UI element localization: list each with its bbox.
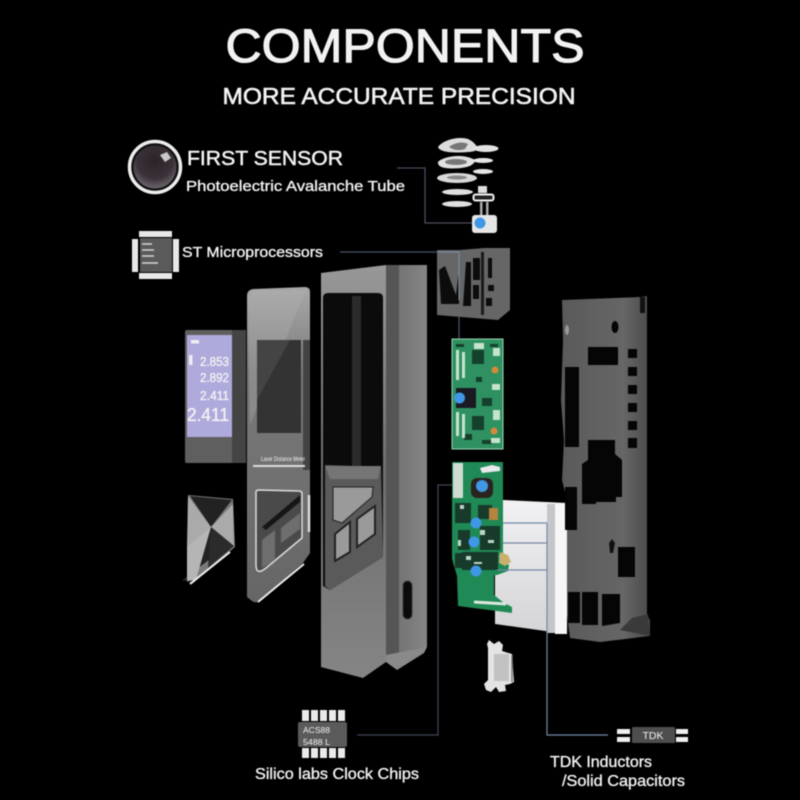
callout lines: inductors and capacitors	[497, 523, 608, 735]
label: TDK inductors and solid capacitors: TDK Inductors	[550, 754, 652, 771]
callout line: microprocessors	[340, 252, 459, 340]
icon: camera lens sensor	[130, 142, 180, 192]
title: COMPONENTS	[226, 19, 584, 72]
circuit board lower	[452, 462, 512, 613]
icon: TDK inductor: TDK	[642, 730, 664, 742]
label: first sensor: FIRST SENSOR	[187, 147, 343, 170]
rear frame	[561, 296, 650, 642]
callout line: sensor	[397, 168, 472, 223]
lens stack exploded	[437, 138, 498, 233]
label: clock chips: Silico labs Clock Chips	[255, 766, 419, 783]
display module: 2.892	[200, 370, 229, 385]
icon: ST microprocessor chip	[132, 231, 179, 279]
display module: 2.411	[187, 405, 229, 425]
label: ST microprocessors: ST Microprocessors	[182, 245, 323, 261]
icon: TDK inductor	[617, 727, 688, 743]
front cover plate: Laser Distance Meter	[261, 457, 305, 463]
label: TDK inductors and solid capacitors: /Solid Capacitors	[562, 773, 685, 790]
icon: clock chip: ACS88	[303, 726, 331, 735]
main housing	[321, 265, 427, 678]
metal button plate	[182, 495, 235, 584]
circuit board upper	[452, 339, 503, 449]
subtitle: MORE ACCURATE PRECISION	[222, 83, 576, 109]
label: first sensor: Photoelectric Avalanche Tube	[186, 179, 405, 195]
icon: clock chip	[298, 710, 347, 758]
white capacitor block	[495, 500, 567, 634]
upper bracket	[437, 248, 510, 320]
display module	[185, 330, 246, 463]
bottom connector part	[484, 640, 514, 692]
label: first sensor	[186, 147, 405, 195]
front cover plate	[247, 287, 310, 602]
display module: 2.411	[200, 388, 229, 403]
icon: clock chip: 5488 L	[303, 738, 331, 747]
display module: 2.853	[200, 354, 229, 369]
callout line: clock chips	[357, 485, 452, 735]
label: TDK inductors and solid capacitors	[550, 754, 685, 790]
